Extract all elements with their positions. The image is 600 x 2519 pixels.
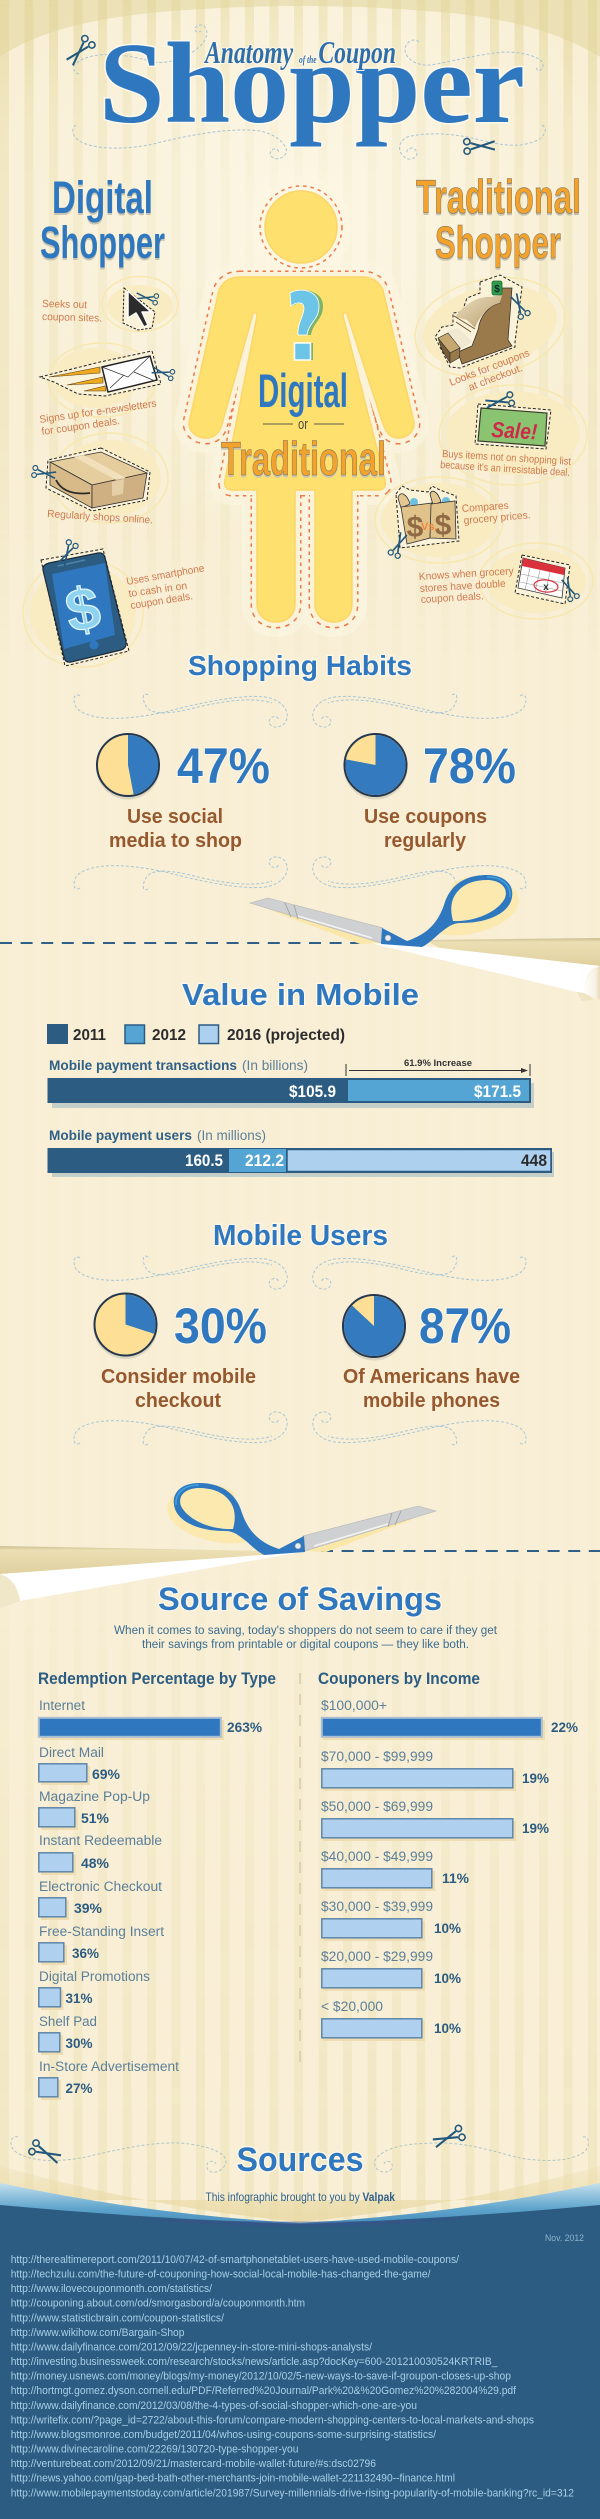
text: Signs up for e-newsletters [39,398,157,426]
chart: mobile payment transactions: $171.5 [474,1082,521,1101]
legend [47,1024,345,1044]
pie chart 78 percent [344,734,408,800]
intro text: their savings from printable or digital coupons — they like both. [142,1639,469,1651]
icon: calendar [515,555,580,604]
text: to cash in on [128,580,188,600]
bar: under $20,000 [321,1999,462,2041]
bar: $20,000 - $29,999: $20,000 - $29,999 [321,1949,433,1964]
source list [11,2254,574,2499]
bar: Instant Redeemable: Instant Redeemable [39,1833,162,1848]
header: title [64,20,545,159]
bar: $50,000 - $69,999: $50,000 - $69,999 [321,1799,433,1814]
source list: http://www.blogsmonroe.com/budget/2011/04/whos-using-coupons-some-surprising-statistics/ [11,2429,437,2441]
bar: Direct Mail [39,1745,121,1785]
bar: Shelf Pad [39,2014,97,2055]
text: Regularly shops online. [47,508,153,526]
caption: checkout [135,1390,221,1412]
heading: Source of Savings [158,1581,442,1617]
bar: Digital Promotions: Digital Promotions [39,1969,150,1984]
text: Compares [461,500,509,515]
text: stores have double [419,578,506,595]
traditional trait: looks for coupons [406,264,574,394]
section: Value in Mobile [47,977,554,1177]
date: Nov. 2012 [545,2233,584,2244]
caption [109,806,242,852]
pie chart 87 percent [342,1295,406,1360]
heading: Digital Shopper [40,172,165,268]
bar: Internet: Internet [39,1698,85,1713]
text [418,565,515,606]
scissors icon [28,2139,63,2166]
text [440,448,571,479]
caption: Consider mobile [101,1366,256,1388]
icon: grocery bags: $ [435,509,452,542]
stat: 87%: 87% [419,1298,511,1354]
bar: Instant Redeemable [39,1833,162,1875]
intro text [114,1625,498,1651]
caption: media to shop [109,830,242,852]
digital trait: shops online [31,433,168,526]
bar: Electronic Checkout: 39% [74,1900,103,1916]
bar: Free-Standing Insert: 36% [72,1945,100,1961]
heading: Value in Mobile [182,977,419,1012]
bar: $20,000 - $29,999: 10% [434,1970,462,1986]
figure label: Digital: Digital [258,364,348,417]
bar: under $20,000: < $20,000 [321,1999,383,2014]
chart: mobile payment users: 160.5 [185,1151,223,1170]
icon: calendar: x [543,582,549,593]
credit: This infographic brought to you by Valpak [206,2190,395,2204]
title swirls [73,25,545,159]
chart: mobile payment users: Mobile payment users [49,1128,192,1143]
text [125,562,205,612]
figure label: Traditional: Traditional [221,432,386,485]
legend: 2011 [73,1027,106,1044]
bar: Shelf Pad: 30% [66,2035,93,2051]
icon: sale sign: Sale! [491,417,538,444]
chart: mobile payment users [48,1128,554,1177]
pie chart 30 percent [94,1294,158,1359]
stat: 78%: 78% [423,738,516,794]
caption: mobile phones [363,1390,500,1412]
bar: Direct Mail: 69% [92,1766,121,1782]
bar: $100,000+ [321,1698,579,1740]
bar: Instant Redeemable: 48% [81,1855,110,1871]
text: coupon sites. [42,311,102,325]
text [39,398,157,438]
swirls [11,2137,588,2172]
section: Sources heading [11,2124,588,2204]
stat: 30%: 30% [174,1298,267,1354]
bar: Free-Standing Insert: Free-Standing Insert [39,1924,164,1939]
chart: mobile payment users: 448 [521,1151,547,1170]
traditional trait: irresistable deal [439,385,587,485]
bar: $40,000 - $49,999: $40,000 - $49,999 [321,1849,433,1864]
text: Buys items not on shopping list [442,448,571,468]
bar: $70,000 - $99,999 [321,1749,550,1791]
bar: $20,000 - $29,999 [321,1949,462,1991]
caption: Of Americans have [343,1366,520,1388]
scissors icon [464,138,495,154]
heading: Traditional Shopper [416,170,581,268]
main title: Shopper: Shopper [99,20,525,147]
bar: $70,000 - $99,999: $70,000 - $99,999 [321,1749,433,1764]
chart: mobile payment users: 212.2 [245,1151,284,1170]
chart heading: Redemption Percentage by Type [38,1670,276,1688]
intro text: When it comes to saving, today's shoppers do not seem to care if they get [114,1625,498,1637]
chart: mobile payment transactions [48,1058,534,1108]
icon: cash register [435,275,531,368]
legend: 2012 [152,1027,186,1044]
bar: Electronic Checkout: Electronic Checkout [39,1879,162,1894]
bar: $100,000+: 22% [551,1719,579,1735]
source list: http://techzulu.com/the-future-of-couponing-how-social-local-mobile-has-changed-the-game/ [11,2269,431,2281]
icon: sale sign [475,391,551,449]
text: for coupon deals. [41,415,121,438]
footer curve [0,2166,600,2519]
source list: http://therealtimereport.com/2011/10/07/42-of-smartphonetablet-users-have-used-mobile-coupons/ [11,2254,460,2266]
text: Uses smartphone [125,562,205,588]
caption: Use coupons [364,806,487,828]
icon: phone: $ [60,573,106,645]
icon: cash register: $ [494,284,500,295]
digital trait: smartphone [23,539,205,667]
central figure [189,177,414,622]
heading: Digital Shopper: Shopper [40,217,165,268]
bar: $70,000 - $99,999: 19% [522,1770,550,1786]
icon: phone [41,539,129,666]
chart: mobile payment users: (In millions) [197,1128,266,1143]
text: coupon deals. [420,590,484,606]
text: Knows when grocery [418,565,515,583]
source list: http://www.wikihow.com/Bargain-Shop [11,2327,185,2339]
bar: Digital Promotions: 31% [66,1990,93,2006]
cut line with scissors [0,875,600,1001]
icon: grocery bags: $ [407,511,424,544]
source list: http://www.dailyfinance.com/2012/09/22/jcpenney-in-store-mini-shops-analysts/ [11,2342,373,2354]
bar: Magazine Pop-Up: 51% [81,1810,110,1826]
bar: $40,000 - $49,999 [321,1849,470,1891]
bar: Magazine Pop-Up [39,1789,150,1830]
bar: Internet [39,1698,263,1740]
traditional trait: compares prices [375,477,531,563]
section: Source of Savings [38,1581,579,2100]
source list: http://venturebeat.com/2012/09/21/mastercard-mobile-wallet-future/#s:dsc02796 [11,2458,376,2470]
icon: grocery bags [387,486,459,559]
scissors icon [64,34,96,68]
text: because it's an irresistable deal. [440,459,570,479]
source list: http://money.usnews.com/money/blogs/my-money/2012/10/02/5-new-ways-to-save-if-groupon-closes-up-shop [11,2371,511,2383]
source list: http://news.yahoo.com/gap-bed-bath-other-merchants-join-mobile-wallet-221132490--finance.html [11,2473,455,2485]
chart: mobile payment transactions: Mobile payment transactions [49,1058,237,1073]
icon: parcel box [31,448,150,511]
icon: question mark [290,290,323,360]
text: at checkout. [467,362,524,394]
source list: http://www.ilovecouponmonth.com/statistics/ [11,2283,213,2295]
source list: http://investing.businessweek.com/research/stocks/news/article.asp?docKey=600-201210030524KRTRIB_ [11,2356,498,2368]
bar: Electronic Checkout [39,1879,162,1920]
icon: cursor [123,288,159,330]
bar: Internet: 263% [227,1719,263,1735]
source list: http://writefix.com/?page_id=2722/about-this-forum/compare-modern-shopping-centers-to-local-markets-and-shops [11,2414,534,2426]
source list: http://www.mobilepaymentstoday.com/article/201987/Survey-millennials-drive-rising-popularity-of-mobile-banking?rc_id=312 [11,2487,574,2499]
bar: Shelf Pad: Shelf Pad [39,2014,97,2029]
source list: http://www.divinecaroline.com/22269/130720-type-shopper-you [11,2444,298,2456]
pie chart 47 percent [96,734,160,800]
bar: In-Store Advertisement [39,2059,179,2100]
bar: Digital Promotions [39,1969,150,2010]
text [461,500,531,527]
heading: Sources [236,2141,364,2179]
caption: regularly [384,830,467,852]
bar: $30,000 - $39,999 [321,1899,462,1941]
chart: couponers by income [318,1670,579,2041]
bar: In-Store Advertisement: 27% [66,2080,93,2096]
text [42,298,102,325]
scissors icon [431,2124,466,2151]
bar: $100,000+: $100,000+ [321,1698,387,1713]
bar: Direct Mail: Direct Mail [39,1745,104,1760]
figure label: or: or [298,416,308,433]
text: Looks for coupons [448,347,531,389]
bar: $40,000 - $49,999: 11% [442,1870,470,1886]
bar: Magazine Pop-Up: Magazine Pop-Up [39,1789,150,1804]
source list: http://www.statisticbrain.com/coupon-statistics/ [11,2312,225,2324]
chart: redemption percentage by type [38,1670,276,2100]
icon: grocery bags: Vs. [421,521,438,533]
caption [364,806,487,852]
bar: $50,000 - $69,999 [321,1799,550,1841]
subtitle: Anatomy of the Coupon: Anatomy of the Coupon [204,34,396,70]
digital trait: seeks out coupon sites [42,276,178,332]
stat: 47%: 47% [177,738,270,794]
caption [101,1366,256,1412]
caption [343,1366,520,1412]
bar: $50,000 - $69,999: 19% [522,1820,550,1836]
text: grocery prices. [463,509,531,527]
caption: Use social [127,806,223,828]
bar: $30,000 - $39,999: $30,000 - $39,999 [321,1899,433,1914]
cut line with scissors [0,1483,600,1608]
icon: envelope [40,351,175,396]
legend: 2016 (projected) [227,1027,345,1044]
heading: Shopping Habits [188,650,412,681]
chart heading: Couponers by Income [318,1670,480,1688]
bar: Free-Standing Insert [39,1924,164,1965]
section: Shopping Habits [74,650,526,890]
chart: mobile payment transactions: $105.9 [289,1082,336,1101]
traditional trait: double coupon days [418,543,593,619]
source list: http://www.dailyfinance.com/2012/03/08/the-4-types-of-social-shopper-which-one-are-you [11,2400,417,2412]
bar: $30,000 - $39,999: 10% [434,1920,462,1936]
digital trait: e-newsletters [39,343,175,438]
text: Seeks out [42,298,87,311]
bar: In-Store Advertisement: In-Store Advertisement [39,2059,179,2074]
source list: http://hortmgt.gomez.dyson.cornell.edu/PDF/Referred%20Journal/Park%20&%20Gomez%20%282004%29.pdf [11,2385,517,2397]
source list: http://couponing.about.com/od/smorgasbord/a/couponmonth.htm [11,2298,305,2310]
bar: under $20,000: 10% [434,2020,462,2036]
chart: mobile payment transactions: (In billions) [242,1058,308,1073]
heading: Digital Shopper: Digital [52,172,153,223]
text: coupon deals. [130,590,194,612]
heading: Mobile Users [213,1220,388,1252]
figure label: or [263,416,344,433]
chart: mobile payment transactions: 61.9% Increase [404,1058,472,1068]
section: Mobile Users [74,1220,526,1445]
